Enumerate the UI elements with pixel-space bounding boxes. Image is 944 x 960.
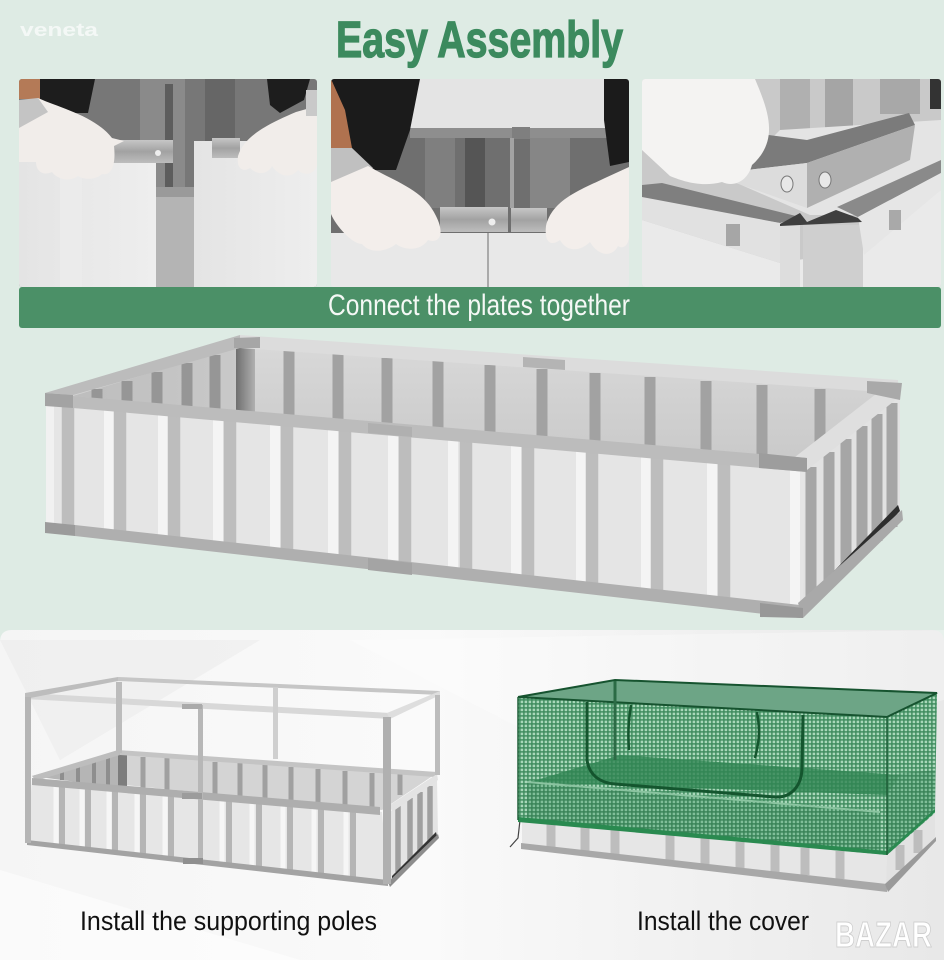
caption band: Connect the plates together: Connect the plates together — [328, 289, 630, 322]
bed with green cover — [510, 680, 937, 892]
inner wall — [32, 752, 437, 810]
zipper door — [587, 702, 803, 797]
right wall — [800, 388, 900, 612]
bed with supporting poles — [25, 677, 440, 887]
large assembled metal bed — [45, 335, 903, 618]
exposed metal bed base — [521, 813, 936, 892]
metal rim frame — [45, 335, 903, 618]
photo: corner bracket — [642, 79, 941, 287]
rolled door ties — [628, 705, 759, 758]
tie cord — [510, 820, 520, 847]
cover mesh — [518, 680, 937, 855]
watermark: veneta: veneta — [20, 20, 99, 40]
right wall — [390, 780, 438, 881]
photo: plates apart — [19, 79, 317, 287]
top frame and posts — [25, 677, 440, 887]
photo: plates joined — [331, 79, 629, 287]
front wall — [27, 780, 388, 883]
caption band: Connect the plates together — [19, 287, 941, 328]
front wall — [46, 398, 805, 614]
title: Easy Assembly — [336, 11, 623, 68]
inner walls — [46, 340, 895, 463]
caption: Install the cover: Install the cover — [637, 906, 809, 936]
caption: Install the supporting poles: Install the supporting poles — [80, 906, 377, 936]
lower panel background — [0, 630, 944, 960]
